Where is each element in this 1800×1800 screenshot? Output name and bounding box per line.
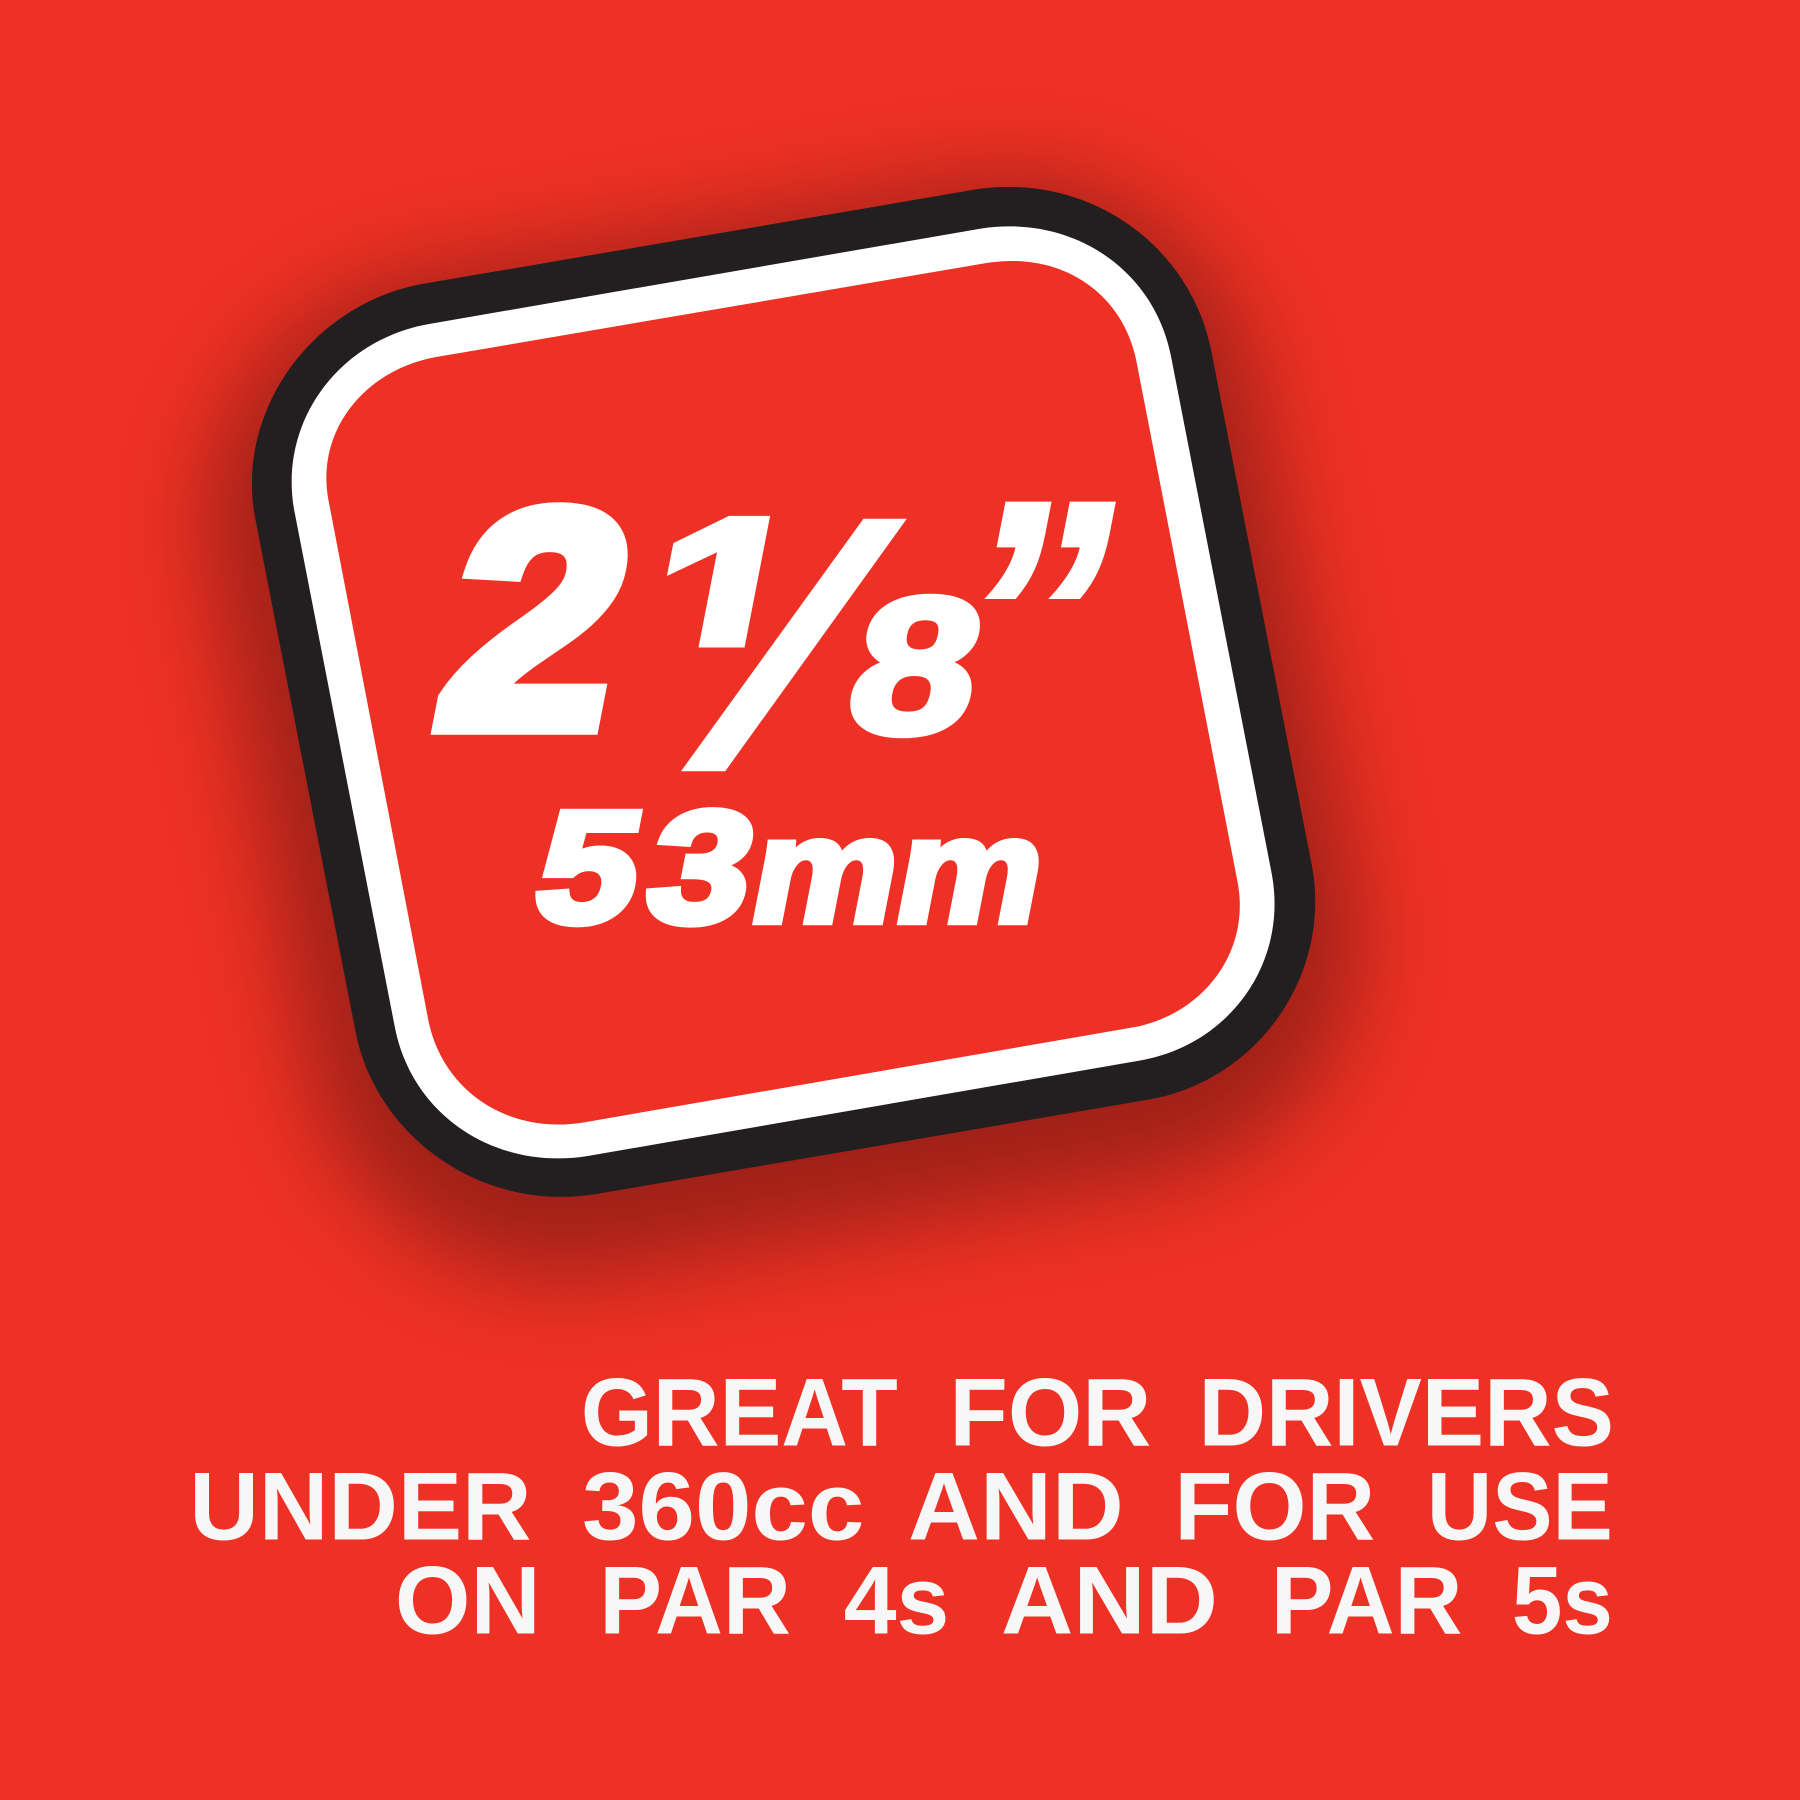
metric number: 3 [634, 779, 770, 956]
caption line 3: 5s [1512, 1548, 1613, 1655]
size in inches [430, 502, 1116, 772]
caption line 1 [581, 1359, 1614, 1466]
caption line 3: PAR [599, 1548, 791, 1655]
badge: red inner panel [326, 261, 1240, 1125]
fraction denominator: 8 [833, 557, 1000, 774]
whole number: 2 [416, 446, 658, 793]
caption line 3: AND [1001, 1548, 1218, 1655]
caption line 2: 360cc [582, 1453, 864, 1560]
caption line 1: FOR [949, 1359, 1151, 1466]
caption line 2: AND [908, 1453, 1124, 1560]
caption line 2: USE [1427, 1453, 1613, 1560]
badge: black outer border [252, 187, 1315, 1197]
badge: white ring [292, 226, 1275, 1158]
metric number: 5 [523, 780, 656, 956]
badge [252, 187, 1315, 1197]
fraction slash: / [648, 462, 939, 833]
caption line 2: UNDER [189, 1453, 532, 1560]
caption line 3: 4s [844, 1548, 949, 1655]
size in millimetres [523, 779, 1060, 956]
caption line 2: FOR [1174, 1453, 1375, 1560]
metric number [523, 779, 770, 956]
caption line 3 [395, 1548, 1613, 1655]
caption line 3: PAR [1271, 1548, 1463, 1655]
caption line 1: DRIVERS [1198, 1359, 1614, 1466]
caption line 1: GREAT [581, 1359, 898, 1466]
fraction numerator: 1 [623, 471, 826, 727]
drop shadow [252, 224, 1315, 1234]
caption [189, 1359, 1614, 1655]
caption line 3: ON [395, 1548, 541, 1655]
metric unit: mm [739, 787, 1060, 954]
inch mark: ” [925, 432, 1151, 803]
caption line 2 [189, 1453, 1613, 1560]
